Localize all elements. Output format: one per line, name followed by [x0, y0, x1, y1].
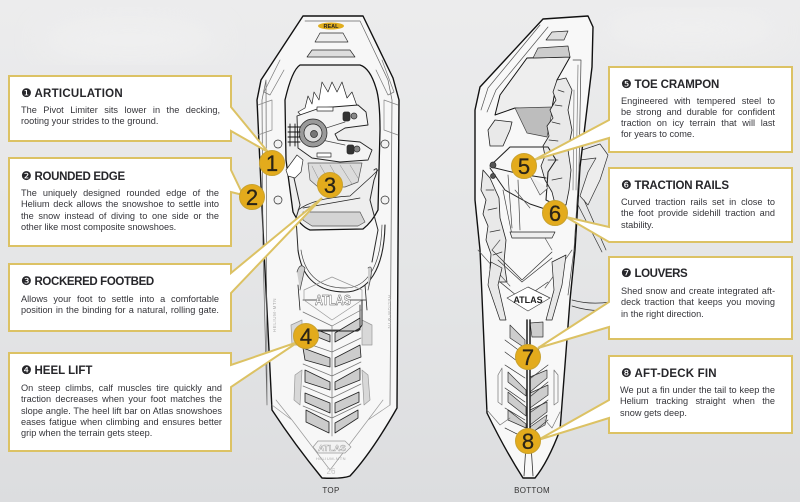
footbed: [308, 163, 362, 187]
text: rounded edge: The uniquely designed rounded edge of the: [21, 188, 219, 198]
heading: toe crampon: TOE CRAMPON: [634, 79, 719, 91]
binding plate: [297, 105, 372, 162]
text: toe crampon: for years to come.: [621, 129, 695, 139]
chevron frames: [505, 340, 550, 438]
marker 5: 5: [518, 154, 530, 179]
marker 3: 3: [324, 173, 336, 198]
text: rockered footbed: [21, 294, 219, 315]
text: articulation: rooting your strides to the ground.: [21, 116, 158, 126]
heading: heel lift: [21, 363, 92, 377]
tail logo: [313, 441, 351, 453]
louvers top: [303, 318, 361, 433]
heel logo: [304, 277, 362, 320]
straps behind deck: [580, 144, 608, 205]
heading: articulation: ARTICULATION: [34, 88, 123, 100]
text: rockered footbed: Allows your foot to settle into a comfortable: [21, 294, 219, 304]
toe slots: [315, 33, 348, 42]
heading: aft-deck fin: AFT-DECK FIN: [634, 368, 717, 380]
text: louvers: Shed snow and create integrated aft-: [621, 286, 775, 296]
marker 3: [318, 172, 342, 198]
marker 6: 6: [549, 201, 561, 226]
panel: traction rails: [566, 167, 793, 243]
side holes: [274, 140, 389, 204]
snowshoe illustration: top view: ATLAS: [315, 292, 351, 309]
heading: louvers: LOUVERS: [634, 268, 687, 280]
text: louvers: in the right direction.: [621, 309, 704, 319]
binding window: [285, 65, 380, 230]
text: aft-deck fin: [620, 385, 775, 418]
deck outline: [475, 16, 593, 478]
text: heel lift: eases fatigue when climbing and ensures better: [21, 417, 222, 427]
marker 4: 4: [300, 324, 312, 349]
model names on deck: HELIUM-MTN: [272, 298, 277, 332]
snowshoe illustration: top view: HELIUM-MTN: [316, 456, 346, 461]
heading: rounded edge: ROUNDED EDGE: [34, 171, 125, 183]
toe slots: [546, 31, 568, 40]
heading: traction rails: ❻: [621, 178, 632, 192]
panel: louvers: [538, 256, 793, 349]
caption: top view: TOP: [322, 486, 340, 495]
snowshoe illustration: top view: ATLAS: [318, 443, 346, 453]
panel: rounded edge: [8, 157, 242, 247]
heading: rounded edge: ❷: [21, 169, 32, 183]
toe logo badge: [318, 22, 344, 30]
window: [495, 57, 570, 115]
text: traction rails: stability.: [621, 220, 654, 230]
aft-deck fin: [527, 320, 530, 440]
toe logo badge: REAL: [324, 24, 339, 30]
text: aft-deck fin: We put a fin under the tail to keep the: [620, 385, 775, 395]
text: rounded edge: [21, 188, 219, 232]
panel: aft-deck fin: [540, 355, 793, 440]
text: traction rails: Curved traction rails set in close to: [621, 197, 775, 207]
text: heel lift: traction decreases when your foot matches the: [21, 394, 222, 404]
caption: bottom view: BOTTOM: [514, 486, 550, 495]
marker 2: 2: [246, 185, 258, 210]
text: louvers: deck traction that keeps you moving: [621, 297, 775, 307]
heading: traction rails: TRACTION RAILS: [634, 180, 729, 192]
bolts: [343, 112, 360, 154]
text: toe crampon: be strong and durable for confident: [621, 107, 775, 117]
snowshoe illustration: top view: 26: [327, 467, 336, 476]
marker 6: [542, 200, 568, 226]
heading: toe crampon: ❺: [621, 77, 632, 91]
text: aft-deck fin: snow gets deep.: [620, 408, 687, 418]
text: aft-deck fin: Helium tracking straight when the: [620, 396, 775, 406]
heading: rockered footbed: ROCKERED FOOTBED: [34, 276, 154, 288]
inner deck lines: [262, 21, 392, 405]
heading: heel lift: HEEL LIFT: [34, 365, 92, 377]
text: traction rails: the foot provide sidehill traction and: [621, 208, 775, 218]
text: heel lift: [21, 383, 222, 438]
text: traction rails: [621, 197, 775, 230]
panel: toe crampon: [534, 66, 793, 160]
text: heel lift: slope angle. The heel lift bar on Atlas snowshoes: [21, 406, 222, 416]
marker 7: [516, 344, 540, 370]
text: rounded edge: Helium deck allows the snowshoe to settle into: [21, 199, 219, 209]
marker 1: 1: [266, 151, 278, 176]
marker 7: 7: [522, 345, 534, 370]
crampon patch: [515, 107, 553, 137]
panel: articulation: [8, 75, 268, 152]
traction rails: [481, 78, 572, 282]
louver frames: [303, 310, 361, 436]
text: rounded edge: other like most composite snowshoes.: [21, 222, 176, 232]
snowshoe illustration: bottom view: ATLAS: [513, 295, 543, 305]
text: rounded edge: the snow instead of diving to one side or the: [21, 211, 219, 221]
text: toe crampon: Engineered with tempered steel to: [621, 96, 775, 106]
text: articulation: The Pivot Limiter sits lower in the decking,: [21, 105, 220, 115]
heading: louvers: ❼: [621, 266, 632, 280]
marker 8: [516, 428, 540, 454]
marker 8: 8: [522, 429, 534, 454]
panel: heel lift: [8, 342, 296, 452]
marker 4: [294, 324, 318, 349]
text: heel lift: On steep climbs, calf muscles tire quickly and: [21, 383, 222, 393]
heel lift bar: [314, 300, 362, 331]
text: heel lift: grip when the terrain gets steep.: [21, 428, 152, 438]
heel strap and buckle: [286, 155, 303, 178]
toe crampon teeth: [298, 82, 364, 120]
text: toe crampon: [621, 96, 775, 139]
lower bindings: [297, 266, 372, 290]
heading: louvers: [621, 266, 688, 280]
marker 1: [260, 150, 284, 176]
heading: articulation: ❶: [21, 86, 32, 100]
heading: aft-deck fin: ❽: [621, 366, 632, 380]
marker 5: [512, 154, 536, 179]
heading: heel lift: ❹: [21, 363, 32, 377]
text: articulation: [21, 105, 220, 126]
louvers bottom: [508, 322, 548, 433]
text: toe crampon: traction on icy terrain that will last: [621, 118, 775, 128]
mid section: [510, 232, 555, 238]
logo bottom: [507, 287, 550, 311]
text: rockered footbed: position in the binding for a natural, rolling gate.: [21, 305, 219, 315]
panel: rockered footbed: [8, 197, 323, 332]
pivot wheel: [299, 119, 327, 147]
snowshoe illustration: top view: HELIUM-MTN: [387, 295, 392, 329]
heading: rockered footbed: ❸: [21, 274, 32, 288]
text: louvers: [621, 286, 775, 319]
marker 2: [240, 184, 264, 210]
crampon frame: [490, 147, 566, 210]
deck outline: [257, 16, 399, 478]
